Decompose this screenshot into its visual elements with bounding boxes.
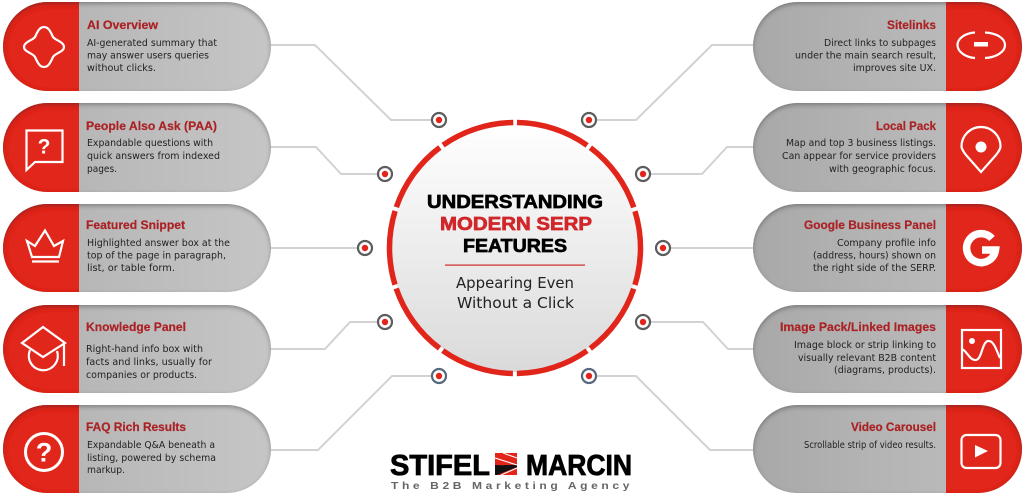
center title [427, 191, 603, 256]
pill: People Also Ask: pages. [87, 164, 117, 175]
pill: Local Pack: with geographic focus. [829, 164, 936, 175]
logo: MARCIN [526, 450, 632, 482]
pill: Featured Snippet: list, or table form. [87, 263, 175, 274]
icon: image frame [962, 330, 1001, 368]
pill: Knowledge Panel: companies or products. [86, 370, 197, 381]
pill: AI Overview: may answer users queries [87, 50, 209, 62]
pill: Sitelinks: improves site UX. [853, 63, 936, 74]
pill: Local Pack: Map and top 3 business listings. [786, 138, 936, 149]
pill: People Also Ask: Expandable questions with [87, 138, 213, 149]
pill: Image Pack [753, 305, 1022, 393]
pill: Image Pack: Image block or strip linking to [794, 340, 936, 351]
pill: Featured Snippet: Highlighted answer box at the [87, 238, 230, 249]
icon: crown [27, 230, 63, 262]
icon: map pin [962, 127, 1000, 172]
pill: Image Pack: Image Pack/Linked Images [780, 320, 936, 334]
pill: FAQ Rich Results: FAQ Rich Results [86, 420, 186, 434]
pill: Google Business Panel: Company profile info [837, 238, 936, 249]
icon: Google G [967, 234, 996, 263]
pill: Knowledge Panel: facts and links, usually for [86, 357, 213, 368]
center subtitle: Without a Click [457, 294, 574, 312]
pill: Google Business Panel: the right side of the SERP. [813, 263, 936, 274]
pill: Video Carousel: Scrollable strip of video results. [804, 440, 936, 451]
pill: AI Overview: without clicks. [87, 63, 156, 74]
pill: Knowledge Panel [3, 305, 271, 393]
pill: Knowledge Panel: Right-hand info box with [86, 344, 203, 355]
center title: UNDERSTANDING [427, 191, 603, 212]
pill: People Also Ask [3, 103, 271, 192]
logo: The B2B Marketing Agency [391, 481, 633, 492]
connector nodes [358, 113, 670, 383]
pill: Google Business Panel: (address, hours) shown on [813, 250, 936, 262]
icon: question speech bubble: ? [38, 136, 50, 158]
pill: People Also Ask: People Also Ask (PAA) [86, 119, 217, 133]
pill: AI Overview [3, 2, 271, 91]
pill: Sitelinks [753, 2, 1022, 91]
icon: link oval [958, 32, 1005, 58]
center title: MODERN SERP [440, 213, 592, 234]
center subtitle [456, 274, 574, 312]
logo: STIFEL [390, 450, 490, 482]
icon: four-point star [24, 27, 64, 67]
pill: Google Business Panel: Google Business Panel [804, 218, 936, 232]
pill: Featured Snippet [3, 204, 271, 292]
icon: graduation cap [22, 327, 65, 370]
pill: Sitelinks: under the main search result, [795, 50, 936, 62]
logo flag mark [495, 453, 517, 475]
pill: Google Business Panel [753, 204, 1022, 292]
pill: People Also Ask: quick answers from indexed [87, 151, 220, 162]
pill: Sitelinks: Direct links to subpages [824, 38, 936, 49]
pill: Video Carousel: Video Carousel [851, 420, 936, 434]
pill: Knowledge Panel: Knowledge Panel [86, 320, 186, 334]
pill: Local Pack: Local Pack [876, 119, 936, 133]
pill: Local Pack [753, 103, 1022, 192]
center subtitle: Appearing Even [456, 274, 574, 292]
logo [390, 450, 633, 492]
icon: question mark circle [26, 434, 62, 470]
connector lines [271, 45, 753, 450]
center circle [390, 122, 640, 374]
pill: FAQ Rich Results: Expandable Q&A beneath a [87, 440, 215, 451]
pill: Featured Snippet: top of the page in paragraph, [87, 250, 226, 262]
pill: Sitelinks: Sitelinks [887, 18, 936, 32]
pill: Local Pack: Can appear for service providers [782, 151, 936, 162]
pill: FAQ Rich Results: listing, powered by schema [87, 453, 216, 464]
pill: Featured Snippet: Featured Snippet [86, 218, 185, 232]
pill: Image Pack: (diagrams, products). [834, 365, 936, 376]
icon: play button [962, 435, 1000, 468]
pill: Video Carousel [753, 405, 1022, 493]
icon: question mark circle: ? [36, 438, 52, 468]
pill: FAQ Rich Results: markup. [87, 465, 125, 476]
pill: AI Overview: AI Overview [87, 18, 159, 32]
icon: question speech bubble [26, 130, 62, 170]
center title: FEATURES [463, 235, 567, 256]
pill: AI Overview: AI-generated summary that [87, 38, 217, 49]
pill: Image Pack: visually relevant B2B content [798, 353, 936, 364]
pill: FAQ Rich Results [3, 405, 271, 493]
